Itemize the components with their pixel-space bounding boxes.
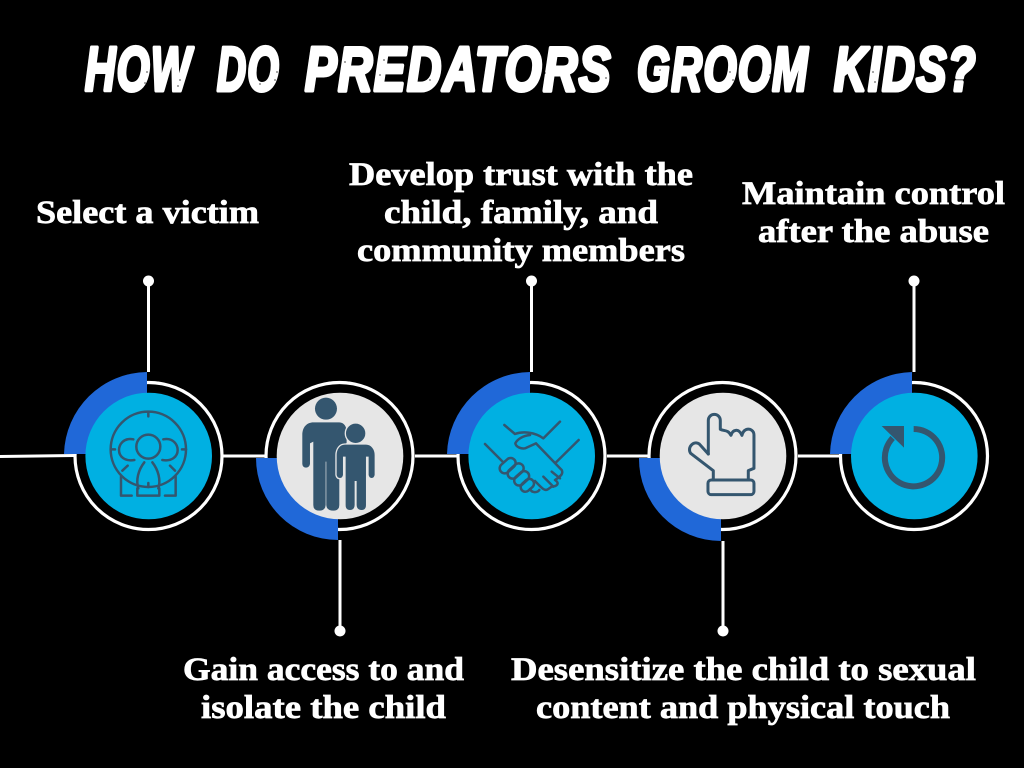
leader line with dot [718, 541, 728, 636]
icon: target on a group of people [111, 412, 186, 496]
icon: adult and child [302, 398, 375, 511]
step 1: select a victim [36, 195, 259, 530]
blue quarter arc [447, 372, 530, 454]
icon: handshake [485, 422, 579, 494]
blue quarter arc [639, 458, 721, 541]
cyan disc [851, 393, 978, 519]
leader line with dot [334, 540, 346, 636]
ring [649, 382, 796, 530]
label: maintain control: Maintain control [742, 176, 1005, 212]
label: desensitize: content and physical touch [536, 690, 950, 726]
blue quarter arc [256, 458, 338, 540]
label: gain access: Gain access to and [183, 652, 464, 688]
title: PREDATORS [305, 36, 612, 104]
label: desensitize: Desensitize the child to sexual [511, 652, 976, 688]
timeline connectors [0, 456, 841, 457]
ring [266, 382, 413, 530]
label: maintain control: after the abuse [758, 214, 989, 250]
leader line with dot [526, 276, 537, 372]
title: DO [217, 36, 280, 104]
label: develop trust: child, family, and [384, 195, 658, 231]
label: develop trust: Develop trust with the [349, 157, 693, 193]
leader line with dot [143, 276, 154, 372]
cyan disc [85, 393, 212, 519]
icon: pointing hand [689, 414, 754, 495]
ring [458, 382, 605, 530]
blue quarter arc [64, 372, 147, 454]
step 5: maintain control [742, 176, 1005, 530]
blue quarter arc [830, 372, 912, 454]
ring [75, 382, 222, 530]
leader line with dot [908, 276, 920, 372]
title: GROOM [637, 36, 809, 104]
step 2: gain access [183, 382, 464, 726]
ring [840, 382, 988, 530]
label: gain access: isolate the child [201, 690, 446, 726]
step 3: develop trust [349, 157, 693, 530]
grey disc [660, 393, 786, 519]
icon: circular arrow [882, 426, 942, 486]
step 4: desensitize [511, 382, 976, 726]
title [85, 36, 977, 104]
grey disc [277, 393, 403, 519]
label: develop trust: community members [357, 233, 685, 269]
cyan disc [468, 393, 595, 519]
label: select a victim: Select a victim [36, 195, 259, 231]
title: HOW [85, 36, 194, 104]
